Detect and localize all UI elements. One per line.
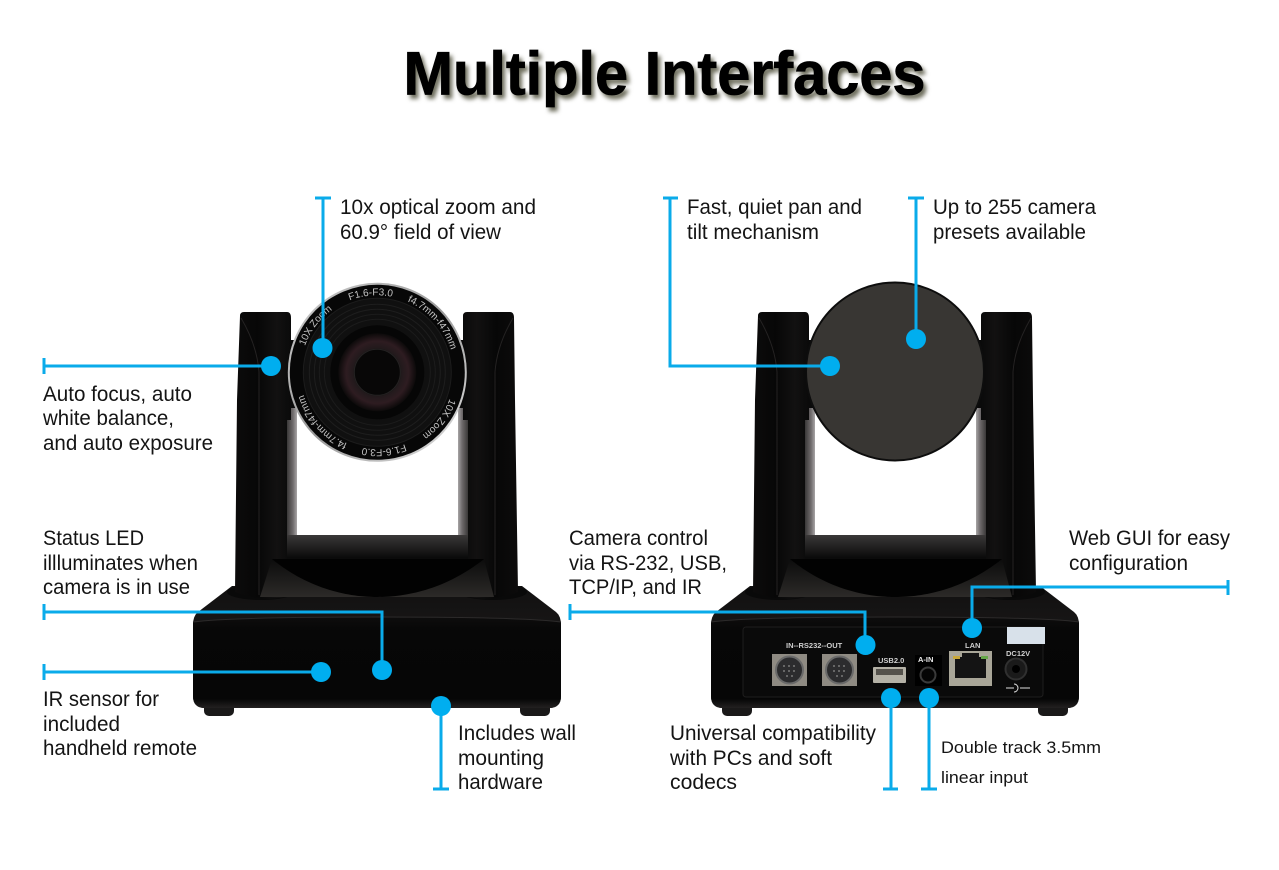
callout: pan and tilt: Fast, quiet pan and xyxy=(687,196,862,219)
callout: auto focus: and auto exposure xyxy=(43,432,213,455)
callout: IR sensor: IR sensor for xyxy=(43,688,159,711)
callout: IR sensor xyxy=(43,662,331,760)
callout: pan and tilt xyxy=(663,196,862,376)
camera lens: 10X Zoom xyxy=(300,306,332,346)
callout: web GUI: configuration xyxy=(1069,552,1188,575)
LAN port: LAN xyxy=(965,641,980,650)
camera lens: F1.6-F3.0 xyxy=(362,444,406,456)
USB port xyxy=(873,656,906,683)
camera lens xyxy=(288,282,467,462)
callout: optical zoom: 10x optical zoom and xyxy=(340,196,536,219)
camera lens: f4.7mm-f47mm xyxy=(408,296,456,350)
callout: pan and tilt: tilt mechanism xyxy=(687,221,819,244)
front camera xyxy=(192,282,562,716)
camera lens: f4.7mm-f47mm xyxy=(299,395,346,450)
callout: wall mounting: Includes wall xyxy=(458,722,576,745)
callout: status LED: Status LED xyxy=(43,527,144,550)
callout: IR sensor: handheld remote xyxy=(43,737,197,760)
rear camera xyxy=(711,282,1079,716)
RS232 ports: IN--RS232--OUT xyxy=(786,641,843,650)
callout: auto focus: Auto focus, auto xyxy=(43,383,192,406)
callout: audio input xyxy=(919,688,1101,789)
callout: optical zoom: 60.9° field of view xyxy=(340,221,502,244)
callout: camera control: via RS-232, USB, xyxy=(569,552,727,575)
callout: status LED: camera is in use xyxy=(43,576,190,599)
callout: web GUI xyxy=(962,527,1230,638)
callout: camera control: Camera control xyxy=(569,527,708,550)
DC power port: DC12V xyxy=(1006,649,1030,658)
callout: wall mounting: hardware xyxy=(458,771,543,794)
rear connector panel xyxy=(743,627,1045,697)
audio input xyxy=(915,655,942,686)
callout: camera control xyxy=(569,527,876,655)
callout: audio input: linear input xyxy=(941,768,1028,787)
RS232 ports xyxy=(772,641,857,686)
callout: status LED xyxy=(43,527,392,680)
callout: audio input: Double track 3.5mm xyxy=(941,738,1101,757)
callout: camera control: TCP/IP, and IR xyxy=(569,576,702,599)
callout: optical zoom xyxy=(312,196,536,358)
USB port: USB2.0 xyxy=(878,656,904,665)
title: Multiple Interfaces xyxy=(404,40,926,108)
callout: USB compatibility: codecs xyxy=(670,771,737,794)
camera lens: F1.6-F3.0 xyxy=(348,288,393,300)
callout: status LED: illluminates when xyxy=(43,552,198,575)
callout: camera presets: presets available xyxy=(933,221,1086,244)
callout: web GUI: Web GUI for easy xyxy=(1069,527,1230,550)
LAN port xyxy=(949,641,992,686)
callout: IR sensor: included xyxy=(43,713,120,736)
callout: USB compatibility: Universal compatibility xyxy=(670,722,876,745)
callout: USB compatibility: with PCs and soft xyxy=(669,747,832,770)
callout: USB compatibility xyxy=(669,688,901,794)
DC power port xyxy=(1006,649,1030,692)
callout: camera presets: Up to 255 camera xyxy=(933,196,1096,219)
audio input: A-IN xyxy=(918,655,933,664)
callout: wall mounting xyxy=(431,696,576,794)
callout: auto focus: white balance, xyxy=(42,407,174,430)
callout: camera presets xyxy=(906,196,1096,349)
callout: wall mounting: mounting xyxy=(458,747,544,770)
camera lens: 10X Zoom xyxy=(422,399,456,438)
camera rear disc xyxy=(806,282,984,460)
callout: auto focus xyxy=(42,356,281,455)
sticker xyxy=(1007,627,1045,644)
